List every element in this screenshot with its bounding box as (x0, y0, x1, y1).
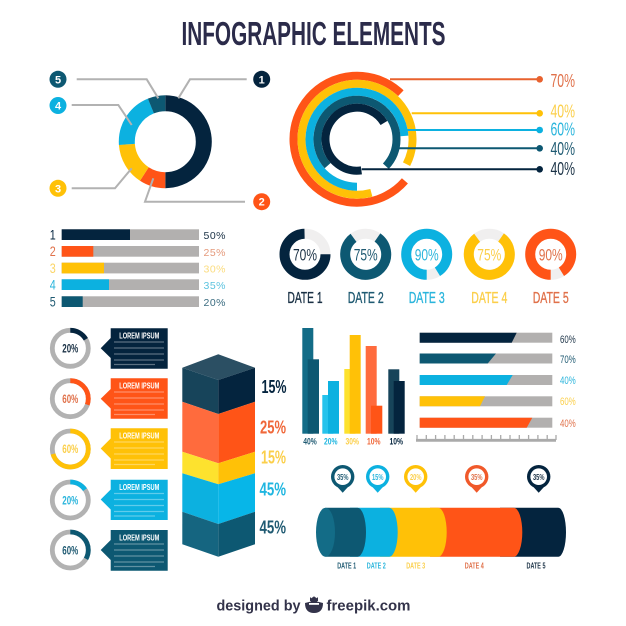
bar tracks (420, 333, 552, 428)
bar percentages (560, 334, 576, 430)
pin values (337, 472, 545, 482)
column percentages (260, 377, 286, 538)
gauge values: 75% (477, 246, 501, 264)
gauge values: 90% (415, 246, 439, 264)
column faces (182, 354, 255, 557)
icon: freepik logo (305, 596, 323, 613)
leader lines with dots (362, 76, 543, 173)
pin values: 20% (410, 472, 422, 482)
panel: isometric stacked column (182, 354, 286, 557)
date labels (288, 290, 569, 307)
numbered badges (50, 71, 270, 210)
panel: ring and text box rows (52, 328, 168, 571)
title: INFOGRAPHIC ELEMENTS (182, 16, 446, 53)
bar percentages: 60% (560, 334, 576, 346)
box headings: LOREM IPSUM (119, 430, 159, 440)
numbered badges: 2 (259, 197, 265, 209)
column percentages: 15% (261, 448, 286, 468)
percentage labels: 40% (550, 159, 575, 179)
bar percentages: 40% (560, 375, 576, 387)
numbered badges: 5 (55, 74, 61, 86)
paired bars (302, 328, 405, 434)
percentage labels (550, 71, 575, 179)
bar fills (62, 229, 130, 307)
map pins (331, 465, 550, 493)
rings (52, 330, 88, 568)
pin values: 35% (471, 472, 483, 482)
bar labels: 30% (346, 436, 359, 447)
bar labels: 20% (324, 436, 338, 447)
column percentages: 45% (260, 518, 286, 538)
row percentages: 25% (204, 247, 226, 259)
bar labels: 10% (367, 436, 381, 447)
cylinder date labels: DATE 1 (337, 562, 357, 570)
gauge values (293, 246, 563, 264)
pin values: 35% (533, 472, 545, 482)
speech boxes (101, 328, 168, 571)
row numbers: 5 (50, 294, 56, 310)
numbered badges: 3 (55, 183, 61, 195)
box headings (119, 330, 159, 542)
footer credit (216, 596, 410, 614)
date labels: DATE 2 (348, 290, 384, 307)
panel: slanted horizontal bars (416, 333, 576, 440)
ring values: 60% (62, 544, 79, 558)
row percentages: 30% (204, 264, 226, 276)
bar labels: 40% (303, 436, 317, 447)
panel: horizontal numbered progress bars (50, 226, 226, 310)
gauge values: 75% (354, 246, 378, 264)
percentage labels: 40% (550, 102, 575, 122)
ring values: 20% (62, 494, 79, 508)
panel: date gauges (284, 226, 571, 307)
column percentages: 15% (262, 377, 286, 397)
bar percentages: 70% (560, 354, 576, 366)
ring values: 20% (62, 342, 79, 356)
row numbers: 3 (50, 260, 56, 276)
box headings: LOREM IPSUM (119, 380, 159, 390)
box headings: LOREM IPSUM (119, 330, 159, 340)
ring values: 60% (62, 442, 79, 456)
pin values: 35% (337, 472, 349, 482)
gauge values: 90% (539, 246, 563, 264)
cylinder date labels (337, 562, 546, 570)
pin values: 15% (372, 472, 384, 482)
cylinder date labels: DATE 5 (526, 562, 546, 570)
bar labels (303, 436, 403, 447)
bar fills (420, 333, 532, 428)
row numbers: 2 (50, 243, 56, 259)
bar labels: 10% (390, 436, 403, 447)
row numbers: 4 (50, 276, 56, 292)
numbered badges: 1 (259, 74, 265, 86)
column percentages: 45% (260, 480, 286, 500)
radial arcs (267, 50, 447, 229)
date labels: DATE 1 (288, 290, 323, 307)
date labels: DATE 5 (533, 290, 569, 307)
row percentages (204, 230, 226, 309)
date labels: DATE 3 (409, 290, 445, 307)
numbered badges: 4 (55, 100, 62, 112)
bar percentages: 60% (560, 396, 576, 408)
callout lines (72, 79, 247, 202)
ring fills (52, 330, 88, 568)
row percentages: 20% (204, 297, 226, 309)
percentage labels: 70% (550, 71, 575, 91)
row percentages: 35% (204, 280, 226, 292)
cylinder date labels: DATE 3 (406, 562, 426, 570)
bar percentages: 40% (560, 418, 576, 430)
bar tracks (62, 229, 199, 307)
cylinder segments (316, 508, 566, 557)
gauge tracks (284, 234, 571, 275)
footer credit: freepik.com (326, 598, 410, 614)
panel: cylinder timeline with map pins (316, 465, 566, 570)
footer credit: designed by (216, 598, 300, 614)
row numbers: 1 (50, 226, 56, 242)
ruler (416, 435, 556, 440)
box text lines (114, 342, 164, 566)
percentage labels: 40% (550, 139, 575, 159)
percentage labels: 60% (550, 120, 575, 140)
cylinder date labels: DATE 4 (465, 562, 484, 570)
donut ring (112, 88, 219, 195)
gauge fills (284, 226, 571, 283)
panel: donut chart with numbered callouts (50, 71, 270, 210)
panel: concentric radial bars (267, 50, 575, 229)
box headings: LOREM IPSUM (119, 532, 159, 542)
box headings: LOREM IPSUM (119, 482, 159, 492)
ring values: 60% (62, 392, 79, 406)
column percentages: 25% (260, 418, 286, 438)
panel: vertical bar chart (302, 328, 405, 447)
ring values (62, 342, 79, 558)
date labels: DATE 4 (471, 290, 507, 307)
row percentages: 50% (204, 230, 226, 242)
cylinder date labels: DATE 2 (367, 562, 386, 570)
row numbers (50, 226, 56, 310)
gauge values: 70% (293, 246, 317, 264)
